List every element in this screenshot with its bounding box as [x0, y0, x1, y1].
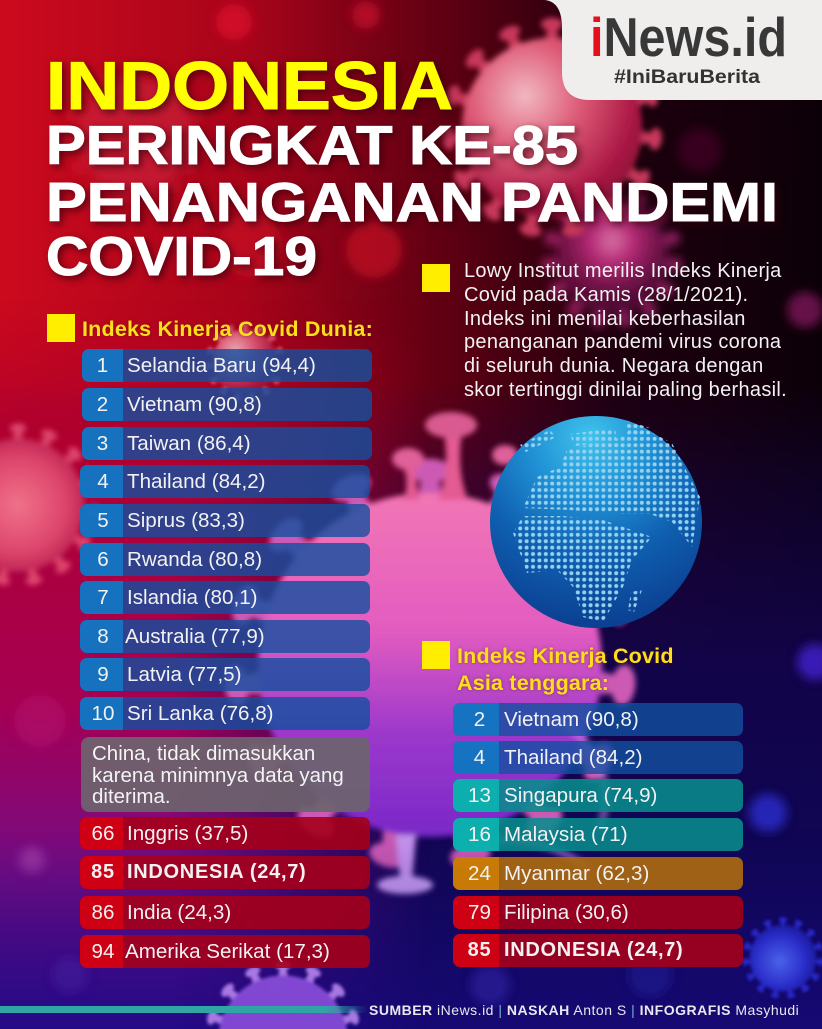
- row 13: 13: [468, 784, 491, 807]
- row 85: [453, 934, 743, 967]
- icon: yellow square: [422, 264, 450, 292]
- row 10: 10: [92, 702, 114, 725]
- row 5: Siprus (83,3): [127, 509, 245, 532]
- row 1: [82, 349, 372, 382]
- row 94: [80, 935, 370, 968]
- row 2: [82, 388, 372, 421]
- row 9: 9: [97, 663, 109, 686]
- heading: Southeast Asia index: Indeks Kinerja Covid: [457, 644, 674, 668]
- title: PENANGANAN PANDEMI: [46, 171, 778, 233]
- note: China excluded: China, tidak dimasukkan: [92, 742, 315, 765]
- logo: iNews.id: iNews.id: [590, 6, 787, 68]
- row 4: [80, 465, 370, 498]
- title: PERINGKAT KE-85: [46, 114, 578, 176]
- blue bokeh: [52, 644, 822, 1005]
- row 4: 4: [97, 470, 109, 493]
- heading: world index: Indeks Kinerja Covid Dunia:: [82, 317, 373, 341]
- row 8: Australia (77,9): [125, 625, 265, 648]
- icon: globe: [490, 416, 702, 628]
- row 86: India (24,3): [127, 901, 231, 924]
- row 85: [80, 856, 370, 889]
- row 16: [453, 818, 743, 851]
- row 66: Inggris (37,5): [127, 822, 248, 845]
- row 4: Thailand (84,2): [504, 746, 643, 769]
- row 85: INDONESIA (24,7): [127, 861, 306, 883]
- virus behind headline: [65, 65, 205, 205]
- row 4: 4: [474, 746, 485, 769]
- note: China excluded: [81, 737, 370, 812]
- title: INDONESIA: [46, 48, 453, 124]
- row 4: Thailand (84,2): [127, 470, 266, 493]
- row 2: 2: [97, 393, 108, 416]
- row 6: 6: [97, 548, 109, 571]
- row 94: 94: [92, 940, 114, 963]
- intro paragraph: penanganan pandemi virus corona: [464, 331, 781, 353]
- row 79: [453, 896, 743, 929]
- title: COVID-19: [46, 225, 317, 287]
- intro paragraph: Covid pada Kamis (28/1/2021).: [464, 284, 748, 306]
- row 9: [80, 658, 370, 691]
- intro paragraph: [464, 260, 787, 401]
- intro paragraph: Indeks ini menilai keberhasilan: [464, 308, 746, 330]
- intro paragraph: di seluruh dunia. Negara dengan: [464, 355, 764, 377]
- virus right of title: [542, 188, 682, 328]
- row 3: Taiwan (86,4): [127, 432, 251, 455]
- panel: southeast Asia ranking: [422, 641, 743, 967]
- row 3: 3: [97, 432, 108, 455]
- logo: iNews.id: #IniBaruBerita: [614, 67, 760, 88]
- row 94: Amerika Serikat (17,3): [125, 940, 330, 963]
- heading: Southeast Asia index: [456, 644, 674, 696]
- row 1: Selandia Baru (94,4): [127, 354, 316, 377]
- row 7: 7: [97, 586, 109, 609]
- row 6: [80, 543, 370, 576]
- row 79: Filipina (30,6): [504, 901, 629, 924]
- icon: yellow square: [47, 314, 75, 342]
- title: [46, 48, 778, 287]
- footer credits: SUMBER iNews.id | NASKAH Anton S | INFOGRAFIS Masyhudi: [369, 1002, 799, 1018]
- virus left: [0, 423, 100, 587]
- row 10: Sri Lanka (76,8): [127, 702, 274, 725]
- intro paragraph: skor tertinggi dinilai paling berhasil.: [464, 379, 787, 401]
- virus top right: [441, 18, 663, 238]
- row 9: Latvia (77,5): [127, 663, 241, 686]
- row 3: [82, 427, 372, 460]
- row 66: [80, 817, 370, 850]
- row 5: 5: [97, 509, 109, 532]
- row 86: [80, 896, 370, 929]
- row 85: INDONESIA (24,7): [504, 939, 683, 961]
- row 85: 85: [91, 861, 115, 883]
- row 8: 8: [97, 625, 109, 648]
- virus near left heading: [205, 322, 285, 402]
- panel: intro text: [422, 260, 787, 896]
- row 85: 85: [468, 939, 491, 961]
- row 24: 24: [468, 862, 491, 885]
- row 13: [453, 779, 743, 812]
- row 4: [453, 741, 743, 774]
- logo: iNews.id: [545, 0, 822, 100]
- row 2: Vietnam (90,8): [504, 708, 639, 731]
- row 10: [80, 697, 370, 730]
- row 1: 1: [97, 354, 108, 377]
- row 2: 2: [474, 708, 485, 731]
- row 24: Myanmar (62,3): [504, 862, 649, 885]
- row 16: Malaysia (71): [504, 823, 628, 846]
- row 24: [453, 857, 743, 890]
- row 66: 66: [92, 822, 114, 845]
- row 7: Islandia (80,1): [127, 586, 258, 609]
- blue virus bottom right: [742, 917, 822, 999]
- note: China excluded: diterima.: [92, 785, 171, 808]
- heading: Southeast Asia index: Asia tenggara:: [457, 671, 609, 695]
- row 13: Singapura (74,9): [504, 784, 657, 807]
- row 7: [80, 581, 370, 614]
- panel: world ranking: [47, 314, 373, 968]
- row 2: Vietnam (90,8): [127, 393, 262, 416]
- row 86: 86: [92, 901, 114, 924]
- note: China excluded: karena minimnya data yang: [92, 764, 344, 786]
- central virus: [223, 412, 637, 894]
- row 79: 79: [468, 901, 491, 924]
- row 5: [80, 504, 370, 537]
- footer bar: [0, 1006, 368, 1013]
- row 16: 16: [468, 823, 491, 846]
- row 2: [453, 703, 743, 736]
- intro paragraph: Lowy Institut merilis Indeks Kinerja: [464, 260, 782, 282]
- row 6: Rwanda (80,8): [127, 548, 262, 571]
- bottom colour wash: [0, 830, 822, 1029]
- icon: yellow square: [422, 641, 450, 669]
- row 8: [80, 620, 370, 653]
- virus bottom centre: [203, 961, 363, 1029]
